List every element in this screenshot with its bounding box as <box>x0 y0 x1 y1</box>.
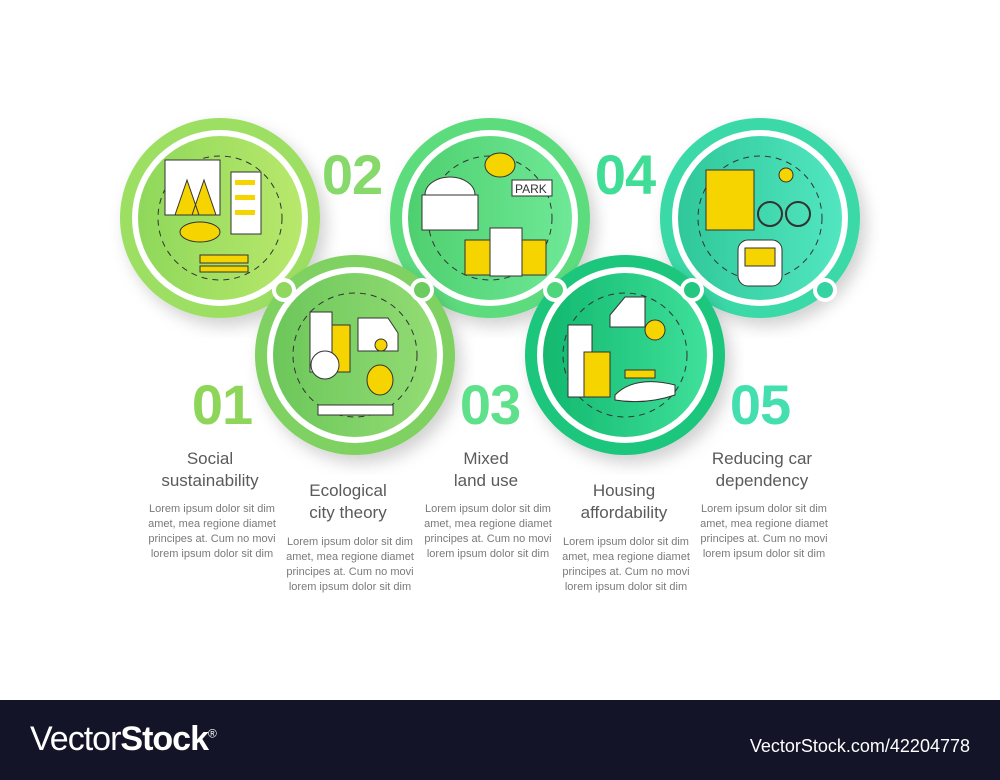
circles graphic <box>120 118 872 470</box>
circle 2 <box>255 255 455 455</box>
circle 3 <box>390 118 590 318</box>
title 2: Ecological <box>309 481 387 500</box>
number 01: 01 <box>192 373 252 436</box>
title 1 <box>161 449 259 490</box>
connector dots <box>272 278 837 302</box>
title 1: Social <box>187 449 233 468</box>
circle 4 <box>525 255 725 455</box>
number 04: 04 <box>595 143 655 206</box>
title 3 <box>454 449 518 490</box>
title 5: Reducing car <box>712 449 812 468</box>
circle 3: PARK <box>515 182 547 196</box>
number 03: 03 <box>460 373 520 436</box>
title 4: Housing <box>593 481 655 500</box>
text 4: Lorem ipsum dolor sit dim amet, mea regione diamet principes at. Cum no movi lorem ipsum dolor sit dim <box>562 536 690 593</box>
footer url: VectorStock.com/42204778 <box>750 736 970 756</box>
title 5: dependency <box>716 471 808 490</box>
title 2 <box>309 481 387 522</box>
number 02: 02 <box>322 143 382 206</box>
title 2: city theory <box>309 503 387 522</box>
title 3: land use <box>454 471 518 490</box>
title 3: Mixed <box>463 449 509 468</box>
title 1: sustainability <box>161 471 259 490</box>
text 5: Lorem ipsum dolor sit dim amet, mea regione diamet principes at. Cum no movi lorem ipsum dolor sit dim <box>700 503 828 560</box>
footer logo: VectorStock® <box>30 720 216 758</box>
circle 5 <box>660 118 860 318</box>
title 4 <box>581 481 668 522</box>
text 3: Lorem ipsum dolor sit dim amet, mea regione diamet principes at. Cum no movi lorem ipsum dolor sit dim <box>424 503 552 560</box>
title 5 <box>712 449 812 490</box>
circle 1 <box>120 118 320 318</box>
title 4: affordability <box>581 503 667 522</box>
number 05: 05 <box>730 373 790 436</box>
text 1: Lorem ipsum dolor sit dim amet, mea regione diamet principes at. Cum no movi lorem ipsum dolor sit dim <box>148 503 276 560</box>
text 2: Lorem ipsum dolor sit dim amet, mea regione diamet principes at. Cum no movi lorem ipsum dolor sit dim <box>286 536 414 593</box>
footer bar <box>0 700 1000 780</box>
